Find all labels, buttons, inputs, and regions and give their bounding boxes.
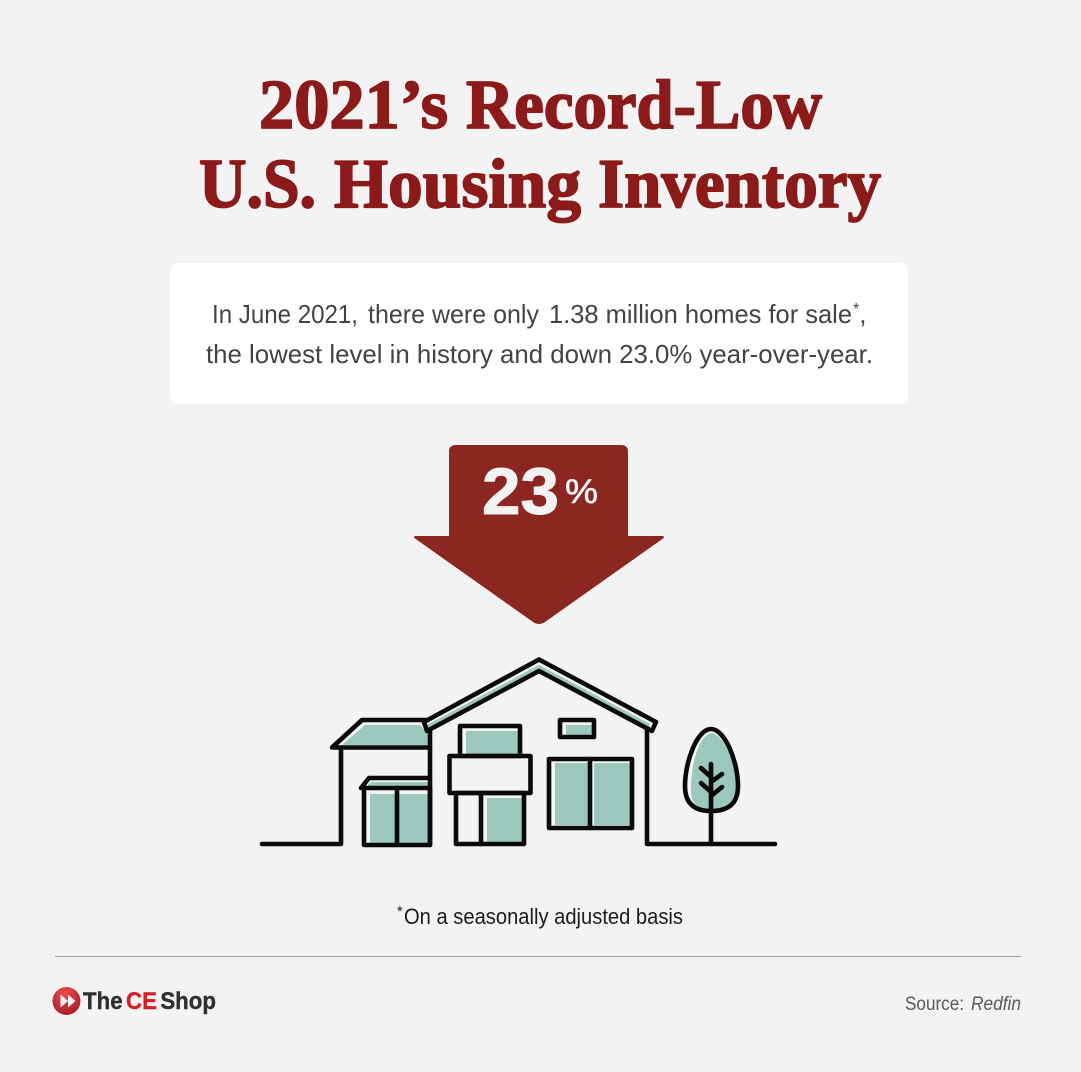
arrow: 23 percent decline xyxy=(414,445,664,624)
footnote: On a seasonally adjusted basis xyxy=(404,904,683,929)
summary text: * xyxy=(853,301,859,318)
title xyxy=(199,67,881,223)
summary text: the lowest level in history and down 23.0% year-over-year. xyxy=(206,339,873,369)
icon: tree xyxy=(685,729,738,844)
statistic: 23%: % xyxy=(565,473,598,511)
title: U.S. xyxy=(199,146,316,223)
footnote: * xyxy=(397,903,403,920)
title: Record-Low xyxy=(466,67,822,144)
source: Source: xyxy=(905,993,964,1015)
title: Housing xyxy=(334,146,581,223)
summary text: In June 2021, xyxy=(212,299,358,329)
title: 2021’s xyxy=(259,67,448,144)
source xyxy=(905,993,1021,1015)
summary text: 1.38 million homes for sale xyxy=(549,299,852,329)
divider xyxy=(55,956,1021,957)
logo: The CE Shop xyxy=(52,987,216,1015)
summary text: there were only xyxy=(368,299,539,329)
house colour fills xyxy=(342,665,650,843)
statistic: 23%: 23 xyxy=(482,454,559,528)
icon: fast-forward badge xyxy=(52,987,80,1015)
source: Redfin xyxy=(971,993,1021,1015)
wordmark: The CE Shop xyxy=(83,988,216,1015)
panel: summary card xyxy=(170,263,908,404)
summary text xyxy=(206,299,873,369)
title: Inventory xyxy=(598,146,881,223)
house outline xyxy=(262,660,775,845)
statistic: 23% xyxy=(482,454,598,528)
summary text: , xyxy=(859,299,866,329)
icon: house and tree xyxy=(262,660,775,845)
